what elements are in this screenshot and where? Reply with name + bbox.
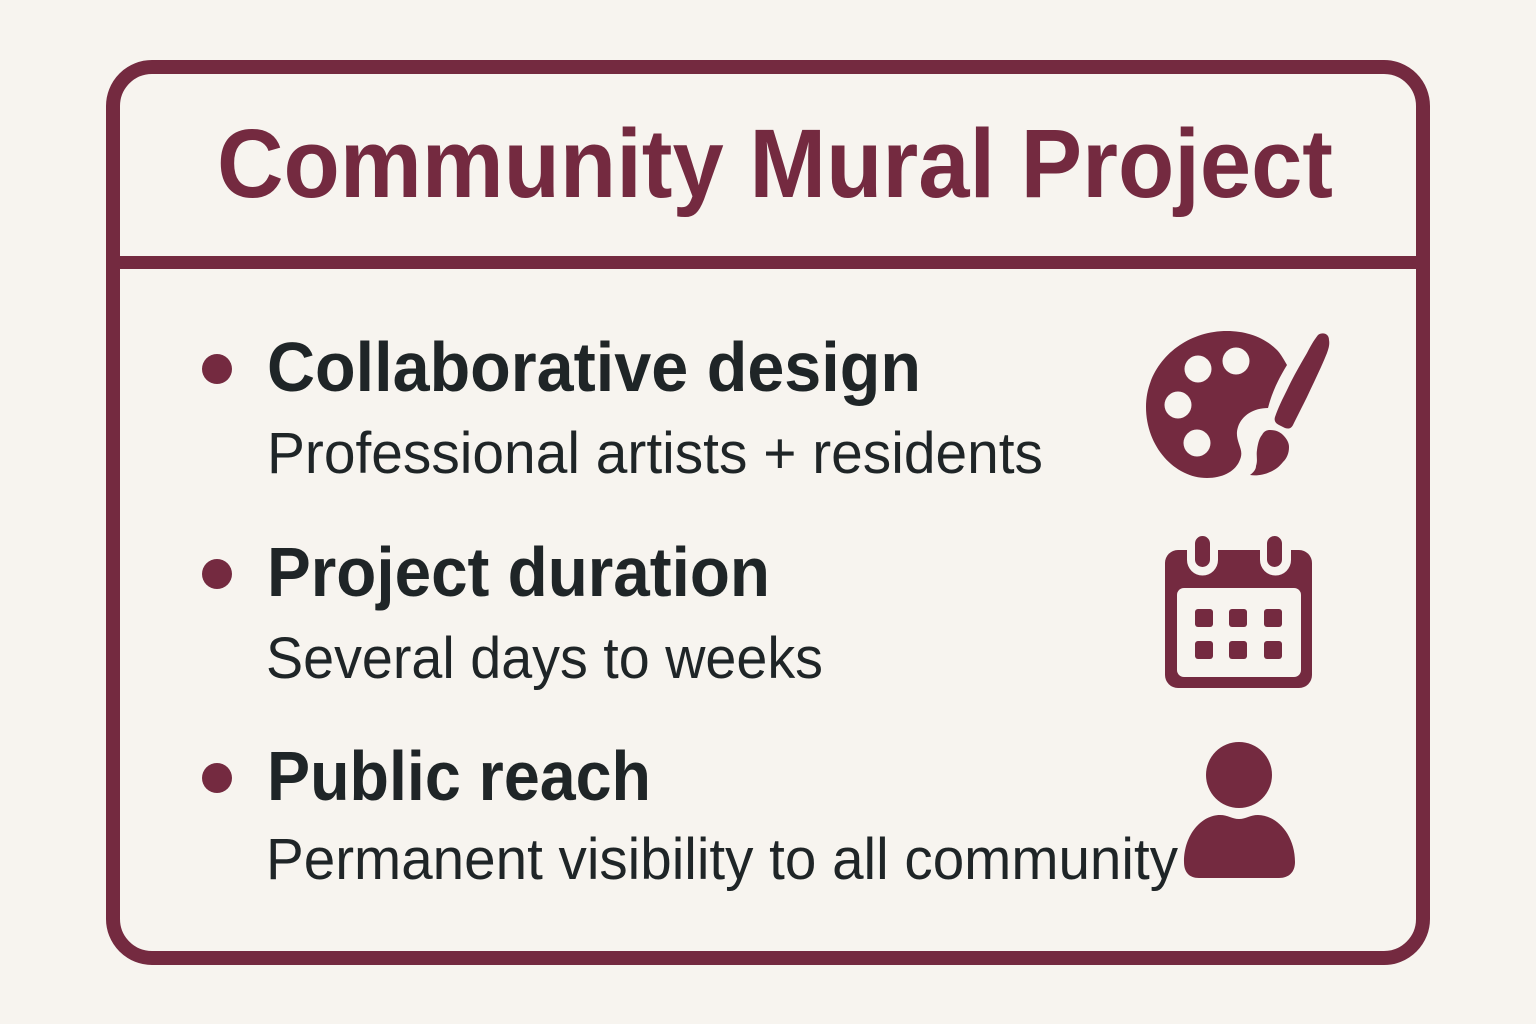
bullet (202, 354, 232, 384)
description: Professional artists + residents (267, 421, 1043, 486)
bullet (202, 559, 232, 589)
description: Permanent visibility to all community (266, 827, 1178, 892)
description: Several days to weeks (266, 626, 823, 691)
heading: Public reach (267, 737, 651, 815)
item: project duration (202, 533, 823, 691)
heading: Project duration (267, 533, 770, 611)
icon: calendar (1165, 536, 1312, 688)
icon: person (1184, 742, 1295, 878)
icon: palette and brush (1146, 331, 1329, 478)
heading: Collaborative design (267, 328, 921, 406)
bullet (202, 763, 232, 793)
item: public reach (202, 737, 1178, 892)
panel: frame (113, 67, 1423, 958)
title: Community Mural Project (217, 109, 1333, 218)
item: collaborative design (202, 328, 1043, 486)
